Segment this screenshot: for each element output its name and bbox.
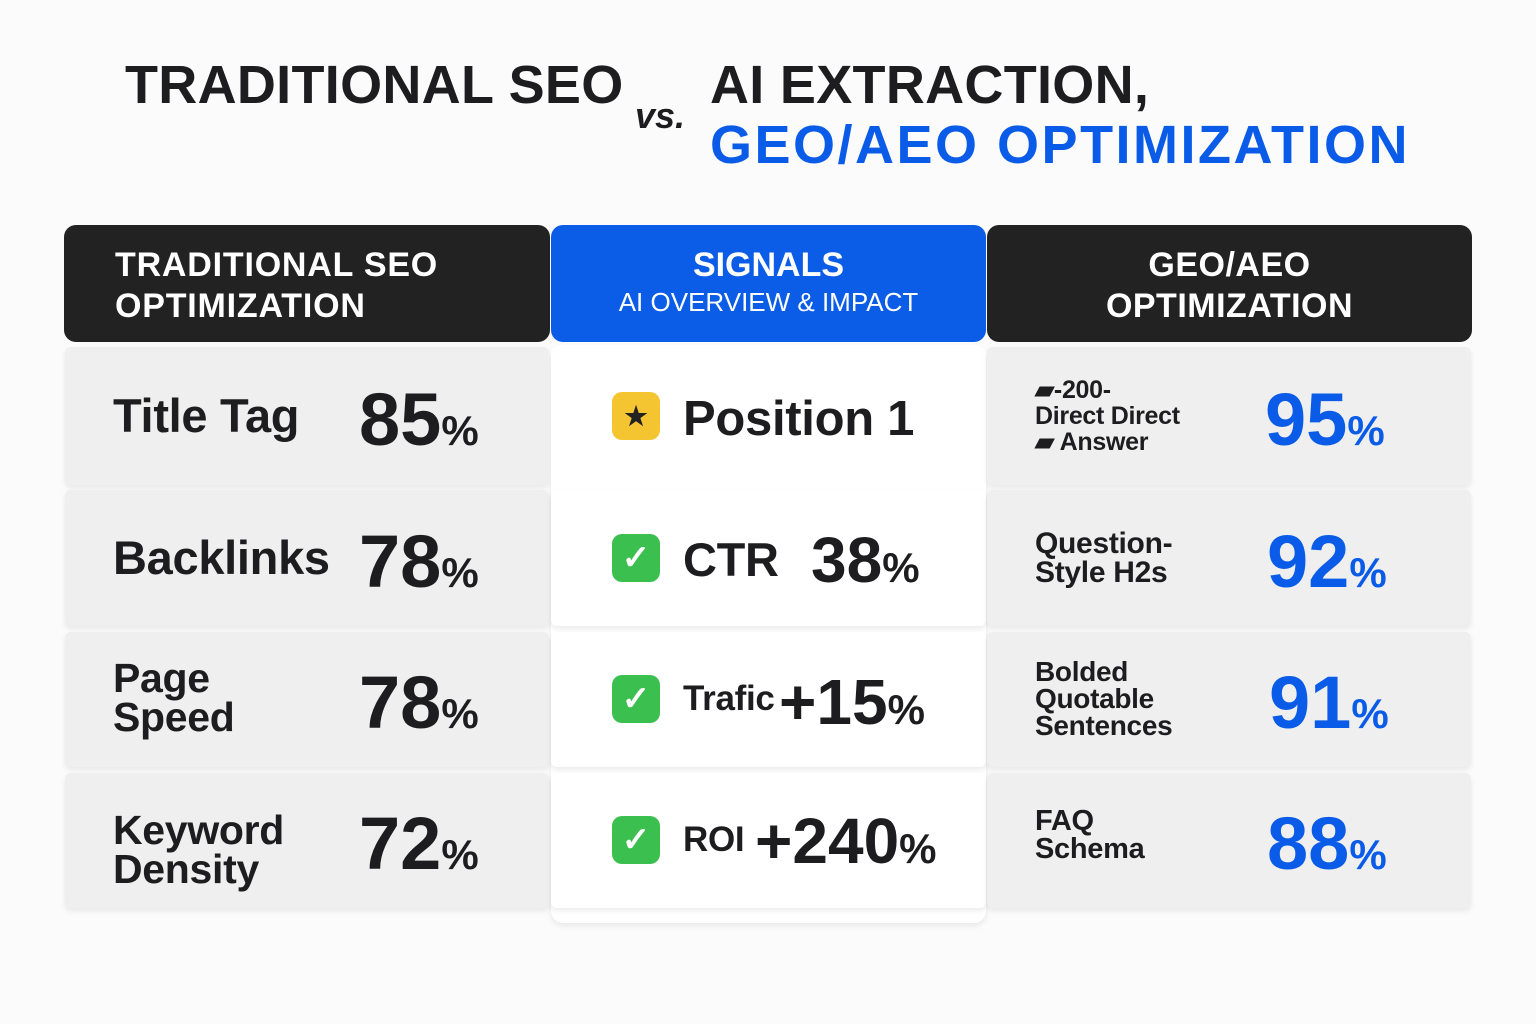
row 2 [65,490,549,626]
row 1: Title Tag [113,389,299,442]
header: geo/aeo: GEO/AEO [1148,246,1311,284]
text: Position 1 [683,392,914,446]
header: signals: AI OVERVIEW & IMPACT [619,287,918,317]
text: 38% [811,524,920,596]
header: traditional seo [64,225,550,342]
text: ✓ [622,680,650,718]
title: AI EXTRACTION, [710,55,1149,115]
text: +240% [755,805,937,877]
text: Sentences [1035,710,1172,741]
header: geo/aeo: OPTIMIZATION [1106,287,1353,325]
text: FAQ [1035,805,1094,837]
row 3 [65,632,549,767]
row 3: 78% [359,661,479,744]
row 3: Page [113,655,210,701]
title [125,55,1410,175]
row 4 [65,773,549,908]
title: TRADITIONAL SEO [125,55,624,115]
text: CTR [683,533,779,586]
text: Bolded [1035,656,1128,687]
text: Question- [1035,527,1172,560]
text: Style H2s [1035,556,1167,588]
row 1 [65,347,549,485]
row 4: Keyword [113,807,284,853]
text: ▰-200- [1035,376,1111,404]
text: ROI [683,820,744,859]
text: ✓ [622,539,650,577]
header: traditional seo: OPTIMIZATION [115,287,366,325]
row 2: 78% [359,520,479,603]
row 4: Density [113,846,259,892]
middle column background [551,345,986,923]
text: Trafic [683,679,775,718]
text: ✓ [622,821,650,859]
header: geo/aeo [987,225,1472,342]
title: vs. [635,95,685,136]
title: GEO/AEO OPTIMIZATION [710,115,1410,175]
text: 91% [1269,661,1389,744]
text: Quotable [1035,683,1154,714]
text: 88% [1267,802,1387,885]
header: signals [551,225,986,342]
text: ★ [624,401,648,431]
text: Direct Direct [1035,402,1180,430]
header: traditional seo: TRADITIONAL SEO [115,246,438,284]
header: signals: SIGNALS [693,246,844,284]
text: 92% [1267,520,1387,603]
row 1: 85% [359,378,479,461]
row 4: 72% [359,802,479,885]
row 2: Backlinks [113,531,330,584]
row 3: Speed [113,694,235,740]
text: +15% [779,666,925,738]
text: ▰ Answer [1035,428,1148,456]
text: Schema [1035,833,1144,865]
text: 95% [1265,378,1385,461]
